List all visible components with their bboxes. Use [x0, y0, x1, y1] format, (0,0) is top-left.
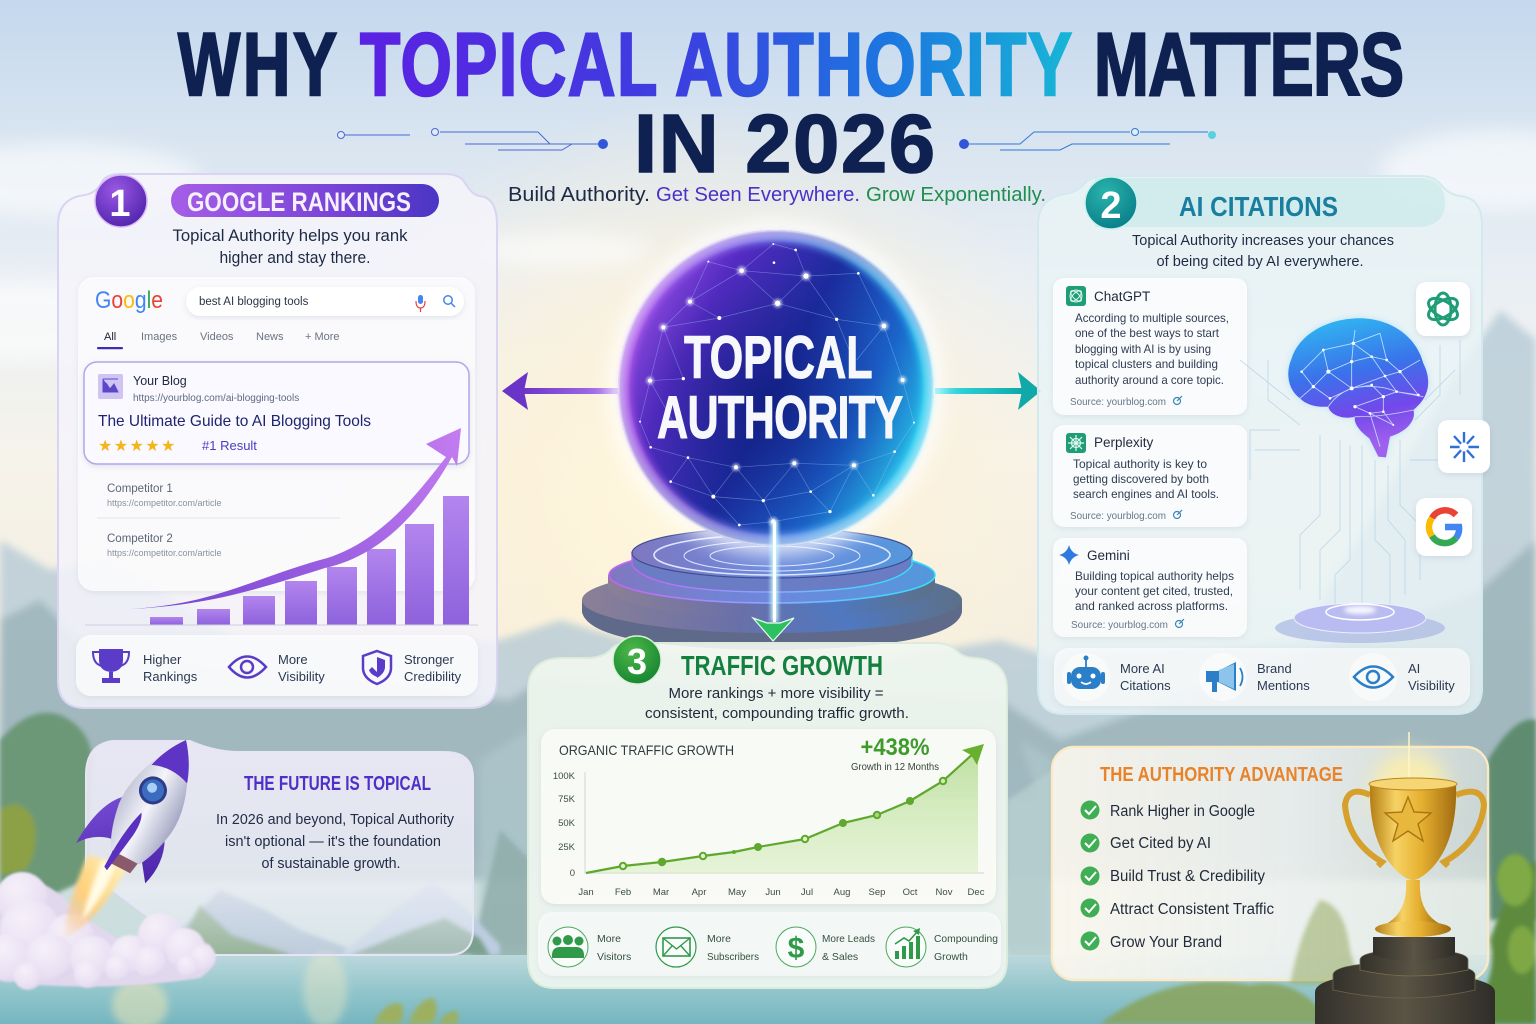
card: chatgpt: ChatGPT [1094, 289, 1150, 304]
card: chatgpt: authority around a core topic. [1075, 373, 1224, 387]
heading pill: GOOGLE RANKINGS [187, 187, 411, 217]
rocket fins [74, 786, 180, 885]
rankings benefits strip: Stronger [404, 652, 455, 667]
tabs: All [104, 331, 116, 343]
icon: megaphone [1199, 653, 1247, 701]
data points [620, 778, 946, 869]
line chart [541, 729, 996, 904]
panel: traffic growth [528, 636, 1007, 988]
panel: the authority advantage [1052, 747, 1488, 980]
citations benefits strip: More AI [1120, 661, 1165, 676]
foliage inside advantage panel [1290, 900, 1360, 985]
traffic benefits strip: & Sales [822, 951, 858, 963]
icon: shield [363, 651, 391, 684]
icon: growth chart [886, 927, 926, 967]
citations benefits strip: Citations [1120, 678, 1171, 693]
y axis: 25K [558, 842, 576, 853]
panel: the authority advantage: THE AUTHORITY ADVANTAGE [1100, 764, 1343, 786]
arrow: to AI Citations [935, 372, 1041, 410]
checklist: Get Cited by AI [1110, 835, 1211, 852]
card: gemini: your content get cited, trusted, [1075, 584, 1233, 598]
title: MATTERS [1094, 14, 1404, 114]
icon tile: google [1416, 498, 1472, 556]
trophy base tiers [1315, 937, 1495, 1024]
subtitle: consistent, compounding traffic growth. [645, 705, 909, 722]
arrow: to Traffic Growth [753, 522, 794, 641]
ai platform base [1275, 603, 1445, 643]
competitor results: Competitor 1 [107, 483, 173, 495]
subtitle [1132, 232, 1394, 270]
tagline: Grow Exponentially. [866, 184, 1046, 206]
future text: of sustainable growth. [262, 856, 400, 872]
checklist: Attract Consistent Traffic [1110, 901, 1274, 918]
pedestal [582, 528, 962, 650]
rising arrow [130, 428, 461, 609]
x axis: Nov [936, 887, 953, 898]
panel: google rankings [58, 174, 497, 708]
card: perplexity [1053, 425, 1247, 527]
x axis: Sep [869, 887, 885, 898]
badge 3: 3 [627, 641, 647, 682]
panel: ai citations [1038, 176, 1490, 714]
card: chatgpt: blogging with AI is by using [1075, 342, 1211, 356]
ai brain [1288, 318, 1428, 457]
rocket [62, 717, 216, 940]
subtitle: of being cited by AI everywhere. [1156, 253, 1364, 270]
search bar [186, 287, 464, 316]
y axis: 100K [553, 771, 576, 782]
icon tile: spark [1438, 420, 1490, 473]
x axis: May [728, 887, 746, 898]
icon: eye [1349, 653, 1397, 701]
citations benefits strip [1054, 648, 1470, 706]
circuit decoration right [959, 128, 1216, 150]
globe network nodes [639, 243, 915, 526]
x axis: Feb [615, 887, 631, 898]
badge 2 [1085, 177, 1137, 229]
citations benefits strip: Visibility [1408, 678, 1455, 693]
x axis: Jun [765, 887, 781, 898]
y axis: 0 [570, 868, 575, 879]
citations benefits strip: AI [1408, 661, 1420, 676]
card: chatgpt: one of the best ways to start [1075, 326, 1220, 340]
panel: the future is topical: THE FUTURE IS TOPICAL [244, 773, 431, 795]
x axis: Jul [801, 887, 813, 898]
competitor results: https://competitor.com/article [107, 498, 222, 508]
tagline: Get Seen Everywhere. [656, 184, 860, 206]
search bar: best AI blogging tools [199, 296, 309, 308]
rankings benefits strip: More [278, 652, 308, 667]
top result [84, 362, 469, 464]
card: chatgpt [1053, 278, 1247, 415]
card: gemini: and ranked across platforms. [1075, 599, 1228, 613]
central globe [610, 222, 942, 554]
badge 2: 2 [1100, 185, 1122, 227]
card: gemini: Source: yourblog.com [1071, 619, 1168, 631]
card: perplexity: Source: yourblog.com [1070, 510, 1166, 522]
globe label [657, 325, 903, 452]
subtitle: higher and stay there. [220, 249, 370, 267]
heading: TRAFFIC GROWTH [681, 650, 883, 681]
badge 3 [613, 636, 661, 684]
traffic benefits strip: More Leads [822, 933, 875, 945]
traffic benefits strip: Compounding [934, 933, 998, 945]
tabs: News [256, 331, 284, 343]
x axis: Aug [834, 887, 850, 898]
rankings benefits strip: Higher [143, 652, 182, 667]
checklist: Rank Higher in Google [1110, 803, 1255, 820]
foliage [374, 854, 1536, 1024]
rankings benefits strip: Rankings [143, 669, 198, 684]
subtitle: Topical Authority increases your chances [1132, 232, 1394, 249]
y axis: 75K [558, 794, 576, 805]
icon tile: chatgpt [1416, 282, 1470, 336]
card: chatgpt: Source: yourblog.com [1070, 396, 1166, 408]
tabs: Videos [200, 331, 234, 343]
x axis: Apr [692, 887, 706, 898]
circuit decoration left [338, 128, 608, 150]
title: WHY [178, 14, 337, 114]
title [178, 14, 1404, 190]
panel: the future is topical [86, 741, 473, 955]
competitor results [97, 483, 340, 558]
card: chatgpt: According to multiple sources, [1075, 311, 1229, 325]
top result: ★★★★★ [98, 438, 177, 455]
heading: AI CITATIONS [1179, 191, 1338, 222]
brain network [1300, 330, 1423, 447]
icon: robot [1062, 653, 1110, 701]
future text: In 2026 and beyond, Topical Authority [216, 812, 455, 828]
line chart: Growth in 12 Months [851, 762, 939, 773]
card: perplexity: Topical authority is key to [1073, 457, 1207, 471]
subtitle: More rankings + more visibility = [668, 685, 884, 702]
checklist: Build Trust & Credibility [1110, 868, 1265, 885]
badge 1: 1 [109, 183, 131, 225]
y axis [553, 771, 576, 879]
tabs [97, 331, 340, 349]
google logo: Google [95, 287, 163, 314]
card: perplexity: Perplexity [1094, 435, 1154, 450]
rankings bar chart [85, 428, 478, 625]
tagline [508, 184, 1046, 206]
icon: trophy [93, 649, 129, 683]
competitor results: https://competitor.com/article [107, 548, 222, 558]
rankings benefits strip [76, 635, 478, 696]
globe network lines [640, 244, 914, 525]
x axis: Oct [903, 887, 918, 898]
tabs: + More [305, 331, 340, 343]
y axis: 50K [558, 818, 576, 829]
x axis [578, 887, 985, 898]
tagline: Build Authority. [508, 184, 650, 206]
traffic benefits strip: Growth [934, 951, 968, 963]
competitor results: Competitor 2 [107, 533, 173, 545]
x axis: Jan [578, 887, 594, 898]
subtitle [645, 685, 909, 722]
traffic benefits strip [538, 912, 1001, 976]
card: gemini [1053, 538, 1247, 637]
card: perplexity: search engines and AI tools. [1073, 487, 1219, 501]
globe label: TOPICAL [684, 325, 873, 392]
rankings benefits strip: Visibility [278, 669, 325, 684]
checklist [1080, 800, 1274, 951]
far mountains behind the future panel [150, 882, 500, 962]
top result: https://yourblog.com/ai-blogging-tools [133, 393, 299, 404]
x axis: Mar [653, 887, 669, 898]
subtitle: Topical Authority helps you rank [172, 227, 408, 245]
title: IN 2026 [634, 97, 935, 190]
line chart: ORGANIC TRAFFIC GROWTH [559, 742, 734, 758]
top result: Your Blog [133, 374, 187, 388]
globe label: AUTHORITY [657, 385, 903, 452]
checklist: Grow Your Brand [1110, 934, 1222, 951]
smoke clouds [0, 872, 216, 990]
traffic benefits strip: Subscribers [707, 951, 759, 963]
traffic benefits strip: More [597, 933, 621, 945]
icon: visitors [548, 927, 588, 967]
icon: dollar: $ [788, 932, 805, 965]
future text: isn't optional — it's the foundation [225, 834, 441, 850]
card: chatgpt: topical clusters and building [1075, 357, 1218, 371]
top result: The Ultimate Guide to AI Blogging Tools [98, 413, 371, 430]
arrow: to Google Rankings [502, 372, 618, 410]
card: gemini: Gemini [1087, 548, 1130, 563]
icon: eye [229, 656, 266, 678]
card: perplexity: getting discovered by both [1073, 472, 1209, 486]
traffic benefits strip: More [707, 933, 731, 945]
line chart: +438% [860, 734, 930, 761]
circuit lines [1240, 340, 1470, 610]
future text [216, 812, 455, 872]
rankings benefits strip: Credibility [404, 669, 462, 684]
search results card [78, 277, 475, 591]
citations benefits strip: Mentions [1257, 678, 1310, 693]
title: TOPICAL AUTHORITY [360, 14, 1072, 114]
badge 1 [95, 175, 147, 227]
x axis: Dec [968, 887, 985, 898]
top result: #1 Result [202, 438, 257, 453]
traffic benefits strip: Visitors [597, 951, 631, 963]
tabs: Images [141, 331, 178, 343]
icon: envelope [656, 927, 696, 967]
subtitle [172, 227, 408, 267]
card: gemini: Building topical authority helps [1075, 569, 1234, 583]
area and line [586, 750, 978, 873]
trophy [1315, 732, 1495, 1024]
icon: dollar [776, 927, 816, 967]
citations benefits strip: Brand [1257, 661, 1292, 676]
